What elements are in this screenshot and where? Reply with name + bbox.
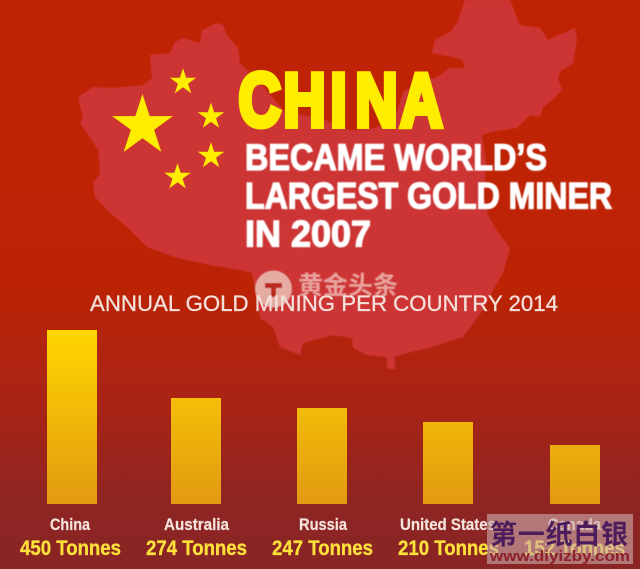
icon: small star 2 — [199, 104, 223, 127]
value: United States: 210 Tonnes — [398, 537, 499, 560]
value: China: 450 Tonnes — [20, 537, 121, 560]
country labels — [50, 515, 601, 534]
icon: large star — [113, 96, 172, 151]
bar: China — [47, 330, 97, 504]
title: China: CHINA — [239, 59, 443, 143]
value: Russia: 247 Tonnes — [272, 537, 373, 560]
watermark: diyizby — [487, 514, 633, 565]
label: Australia: Australia — [164, 515, 229, 534]
watermark url: www.diyizby.com — [489, 548, 630, 565]
label: Russia: Russia — [299, 515, 347, 534]
watermark: gold headlines logo — [255, 270, 398, 308]
map of China — [78, 0, 577, 370]
watermark panel — [487, 514, 633, 564]
bar: Canada — [550, 445, 600, 504]
icon: small star 3 — [199, 144, 223, 166]
chart heading: ANNUAL GOLD MINING PER COUNTRY 2014 — [90, 291, 558, 316]
tonnage values — [20, 537, 625, 560]
bar: United States — [423, 422, 473, 504]
icon: small star 4 — [166, 164, 189, 187]
bar chart — [47, 330, 600, 504]
label: China: China — [50, 515, 90, 534]
icon: T logo — [255, 270, 292, 308]
value: Canada: 152 Tonnes — [524, 537, 625, 560]
subtitle line 3: IN 2007 — [245, 214, 371, 254]
value: Australia: 274 Tonnes — [146, 537, 247, 560]
icon: small star 1 — [171, 70, 195, 92]
logo text: 黄金头条 — [298, 272, 398, 300]
subtitle heading — [245, 137, 612, 254]
bar: Russia — [297, 408, 347, 504]
subtitle line 1: BECAME WORLD’S — [245, 137, 547, 178]
label: United States: United States — [400, 515, 496, 534]
bar: Australia — [171, 398, 221, 504]
label: Canada: Canada — [548, 515, 601, 534]
icon: flag stars — [113, 70, 223, 187]
watermark title: 第一纸白银 — [490, 520, 628, 550]
